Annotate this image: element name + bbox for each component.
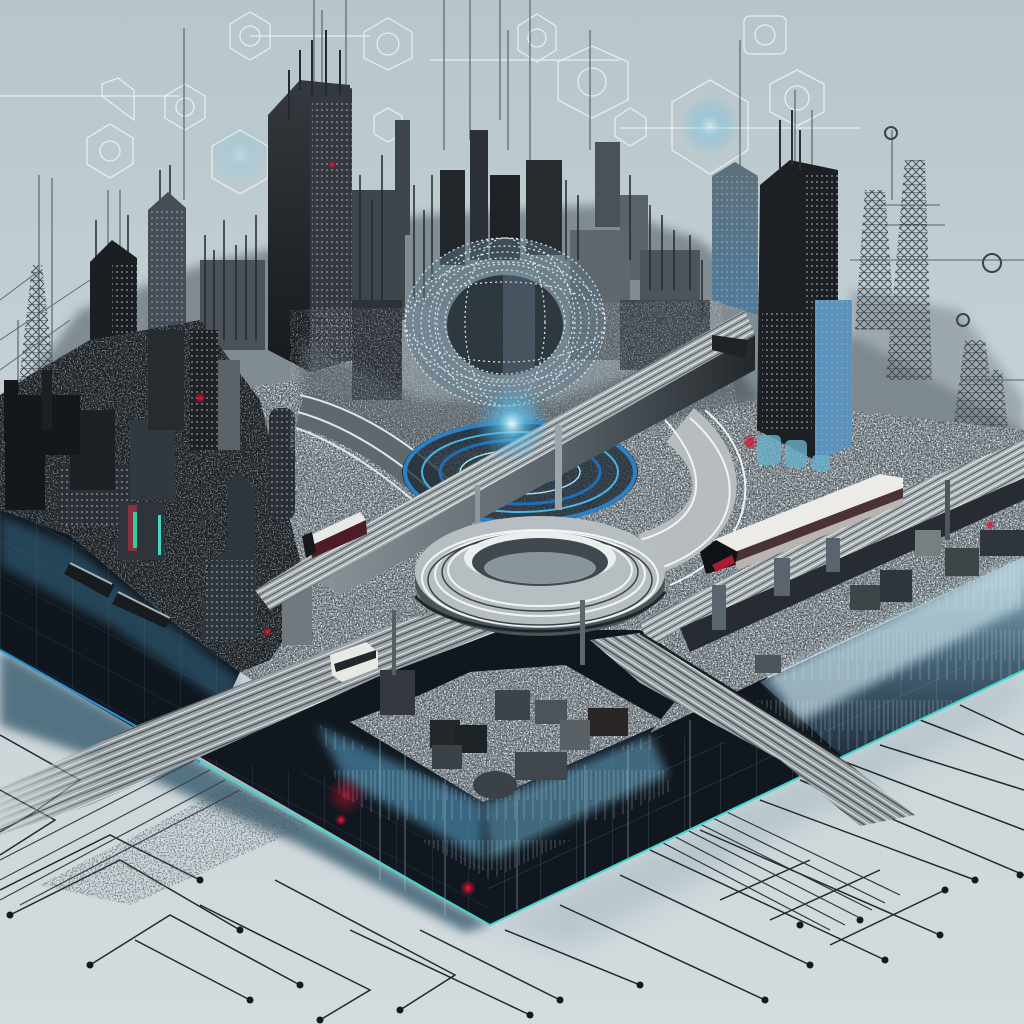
lower curved road, right [640,410,745,585]
left cliff blue spray [0,515,240,705]
central block grid right [483,733,843,925]
central block blue spray right [483,736,668,860]
dark pit under energy rings [402,420,638,524]
tower: right big [757,110,852,462]
right platform buildings [755,480,1024,673]
right cliff spray [767,557,1024,722]
lower left road [0,598,515,835]
central block blue spray left [317,726,483,860]
left cliff grid [0,510,240,757]
hexagon icons floating in sky [0,12,860,194]
circuit nodes [6,872,1024,1024]
power pylons right [850,127,1024,450]
ground reflection shadow, left [0,650,490,932]
dark speckle on platform [0,380,1024,800]
central platform dark speckle [350,665,665,802]
mid-ground gritty shadow [300,340,760,450]
central gritty platform [350,665,665,802]
train: right [700,474,903,574]
background towers [200,120,710,400]
right cliff base [760,557,1024,757]
train: upper left [302,512,367,558]
platform top surface [0,380,1024,800]
tower: main dark skyscraper [268,30,352,372]
hazy base behind pylons [850,290,1024,470]
right cliff grid [760,557,1024,757]
circuit traces on ground [0,705,1024,1020]
bus on lower road [330,642,378,682]
circular interchange [415,516,665,636]
ground reflection, right [490,670,1024,950]
cyan border lines [0,650,1024,925]
speckled road wires on ground, left [0,750,310,905]
right cliff drips [740,557,1024,757]
blue cylinders at tower base [757,435,830,471]
upper diagonal viaduct [255,310,755,610]
central block drips [320,725,672,880]
mid-ground speckle [290,300,740,470]
central mini buildings [380,600,628,799]
power pylons left [0,265,90,410]
data sphere [405,238,605,420]
glows in sky [208,96,740,187]
blue part of left border [0,650,200,762]
light speckle on platform [0,380,1024,800]
central dark block [200,630,843,925]
distant hazy skyline [0,205,1024,540]
lower curved road, left [296,395,478,530]
lower right road [590,633,915,826]
blue energy rings [405,422,635,522]
speckled road wires on ground, right [600,780,900,930]
central light glow [474,386,550,462]
foreground left city block [0,320,312,672]
thin antenna lines [18,0,892,430]
central block grid left [200,757,490,925]
right upper road [640,440,1024,652]
vertical light streaks on block [380,720,690,915]
tower: right slim [712,162,758,315]
left cliff [0,510,240,757]
red beacons [194,161,995,896]
skyline vertical spikes [96,155,702,340]
tower: left mid [148,192,186,335]
central platform speckle [350,665,665,802]
tower: far left [90,240,137,420]
